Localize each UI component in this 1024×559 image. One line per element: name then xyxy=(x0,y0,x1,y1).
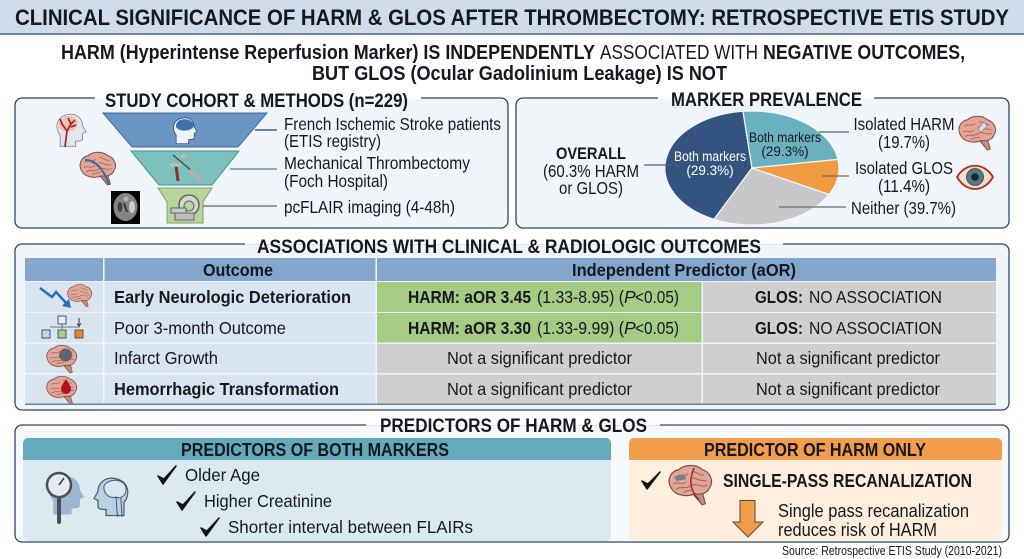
table row: hemorrhagic transformation: Hemorrhagic Transformation xyxy=(114,379,339,399)
arrow: reduces risk xyxy=(733,500,763,537)
panel: predictors of HARM and GLOS xyxy=(15,415,1009,542)
table header row: Outcome xyxy=(203,260,273,280)
table row: infarct growth: Not a significant predictor xyxy=(756,348,940,368)
label: isolated HARM: (19.7%) xyxy=(878,132,930,152)
table row: poor 3-month outcome: NO ASSOCIATION xyxy=(809,318,942,338)
table row: infarct growth: Not a significant predictor xyxy=(447,348,632,368)
table row: early neurologic deterioration: <0.05) xyxy=(635,287,679,307)
icon: modified Rankin score boxes xyxy=(42,316,83,338)
label: isolated GLOS: Isolated GLOS xyxy=(855,158,953,178)
table row: early neurologic deterioration: Early Neurologic Deterioration xyxy=(114,287,351,307)
sub-panel: predictor of HARM only xyxy=(629,438,1002,541)
overall label: OVERALL xyxy=(556,144,626,163)
text: single pass explanation: Single pass recanalization xyxy=(778,501,969,521)
subtitle xyxy=(61,42,965,85)
icon: head with cerebral arteries xyxy=(57,114,86,147)
pie label: both markers, blue slice: (29.3%) xyxy=(686,163,734,178)
heading: marker prevalence: MARKER PREVALENCE xyxy=(671,89,862,111)
heading: associations: ASSOCIATIONS WITH CLINICAL & RADIOLOGIC OUTCOMES xyxy=(257,236,761,258)
funnel tier 2: thrombectomy xyxy=(131,151,239,185)
table row: infarct growth xyxy=(25,344,996,373)
table row: poor 3-month outcome: Poor 3-month Outcome xyxy=(114,318,286,338)
label: single-pass recanalization: SINGLE-PASS RECANALIZATION xyxy=(723,471,972,491)
leader lines xyxy=(255,129,277,131)
pie label: both markers, blue slice: Both markers xyxy=(674,149,746,164)
text: single pass explanation: reduces risk of HARM xyxy=(778,520,937,540)
label: isolated HARM xyxy=(854,114,954,152)
table row: early neurologic deterioration: GLOS: xyxy=(755,287,803,307)
funnel tier 3: imaging xyxy=(158,188,212,223)
table row: poor 3-month outcome: <0.05) xyxy=(635,318,679,338)
subtitle: ASSOCIATED WITH xyxy=(600,42,758,64)
label: thrombectomy: (Foch Hospital) xyxy=(284,171,388,191)
pie label: both markers, blue slice xyxy=(674,149,746,178)
overall label: or GLOS) xyxy=(559,178,623,198)
check mark xyxy=(642,472,660,489)
subtitle: BUT GLOS (Ocular Gadolinium Leakage) IS NOT xyxy=(312,63,727,85)
table row: hemorrhagic transformation: Not a significant predictor xyxy=(447,379,632,399)
heading: predictors: PREDICTORS OF HARM & GLOS xyxy=(380,415,647,437)
label: patients: (ETIS registry) xyxy=(284,131,381,151)
pie label: both markers, teal slice xyxy=(749,130,821,159)
icon: head with brain outline xyxy=(94,478,128,517)
label: isolated GLOS: (11.4%) xyxy=(878,176,930,196)
check item: older age: Older Age xyxy=(185,465,260,485)
table row: early neurologic deterioration: P xyxy=(624,287,636,307)
icon: brain with lesion xyxy=(959,116,996,150)
icon: brain with bleed xyxy=(47,376,77,404)
table row: poor 3-month outcome: HARM: aOR 3.30 xyxy=(408,318,531,338)
check item: higher creatinine: Higher Creatinine xyxy=(204,491,332,511)
pie label: both markers, teal slice: Both markers xyxy=(749,130,821,145)
subtitle: HARM (Hyperintense Reperfusion Marker) IS INDEPENDENTLY xyxy=(61,42,596,64)
icon: eye xyxy=(957,166,993,189)
icon: MRI scan xyxy=(111,191,140,224)
heading: study cohort: STUDY COHORT & METHODS (n=229) xyxy=(105,90,408,112)
table header row: Independent Predictor (aOR) xyxy=(572,260,796,280)
label: imaging: pcFLAIR imaging (4-48h) xyxy=(284,197,455,217)
pie chart xyxy=(665,111,839,225)
text: single pass explanation xyxy=(778,501,969,540)
icon: head with magnifier gauge xyxy=(47,473,84,522)
table row: hemorrhagic transformation: Not a significant predictor xyxy=(756,379,940,399)
check item: shorter interval: Shorter interval between FLAIRs xyxy=(228,517,473,537)
label: isolated GLOS xyxy=(855,158,953,196)
sub-panel: predictor of HARM only: PREDICTOR OF HARM ONLY xyxy=(704,439,927,460)
subtitle: NEGATIVE OUTCOMES, xyxy=(763,42,965,64)
table row: early neurologic deterioration: HARM: aOR 3.45 xyxy=(408,287,531,307)
overall label xyxy=(543,144,639,198)
pie label: both markers, teal slice: (29.3%) xyxy=(761,144,809,159)
icon: brain with infarct xyxy=(47,345,77,373)
label: neither: Neither (39.7%) xyxy=(851,198,956,218)
funnel tier 1: patients xyxy=(103,113,267,147)
table row: early neurologic deterioration xyxy=(25,282,996,312)
panel: study cohort and methods xyxy=(15,90,508,228)
label: patients: French Ischemic Stroke patients xyxy=(284,114,501,134)
sub-panel: predictors of both markers xyxy=(23,438,611,541)
table row: poor 3-month outcome: (1.33-9.99) ( xyxy=(537,318,624,338)
panel: associations with outcomes xyxy=(15,236,1009,410)
label: patients xyxy=(284,114,501,151)
icon: brain with vessel xyxy=(669,465,712,505)
table row: early neurologic deterioration: NO ASSOCIATION xyxy=(809,287,942,307)
table row: hemorrhagic transformation xyxy=(25,374,996,404)
table row: poor 3-month outcome xyxy=(25,313,996,342)
table row: poor 3-month outcome: P xyxy=(624,318,636,338)
table row: poor 3-month outcome: GLOS: xyxy=(755,318,803,338)
sub-panel: predictors of both markers: PREDICTORS OF BOTH MARKERS xyxy=(181,439,449,460)
panel: marker prevalence xyxy=(516,89,1009,228)
label: thrombectomy: Mechanical Thrombectomy xyxy=(284,153,470,173)
icon: brain with catheter xyxy=(80,152,115,185)
table header row xyxy=(25,258,996,281)
overall label: (60.3% HARM xyxy=(543,161,639,181)
icon: declining arrow and brain xyxy=(40,284,92,308)
table row: infarct growth: Infarct Growth xyxy=(114,348,218,368)
table row: early neurologic deterioration: (1.33-8.95) ( xyxy=(537,287,624,307)
label: thrombectomy xyxy=(284,153,470,191)
label: isolated HARM: Isolated HARM xyxy=(854,114,954,134)
